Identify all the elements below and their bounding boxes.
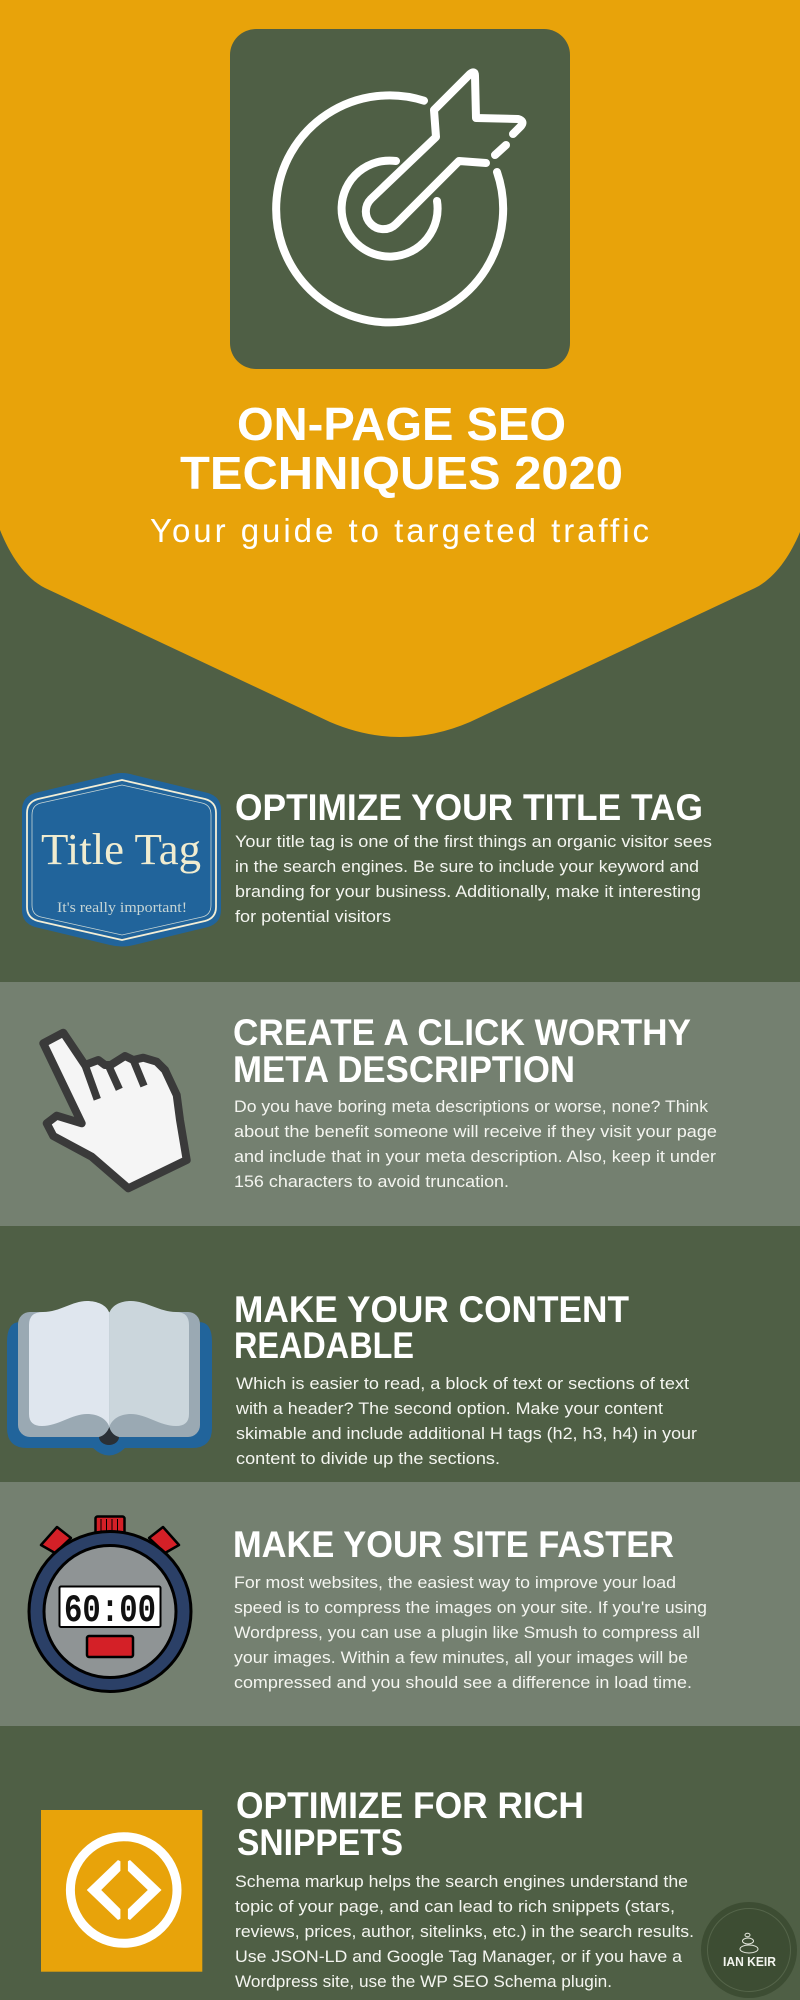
icon: pointing hand cursor (43, 1033, 187, 1188)
title (180, 398, 623, 499)
text block: title tag copy: Your title tag is one of the first things an organic visitor sees (235, 832, 712, 851)
text block: title tag copy (235, 832, 712, 926)
text block: rich snippets copy: Wordpress site, use the WP SEO Schema plugin. (235, 1972, 612, 1991)
icon: stopwatch: 60:00 (64, 1589, 156, 1633)
text block: rich snippets copy (235, 1872, 694, 1991)
heading: make your content readable (234, 1289, 629, 1366)
subtitle: Your guide to targeted traffic (150, 512, 649, 549)
icon: code brackets (41, 1810, 202, 1972)
text block: meta description copy: about the benefit someone will receive if they visit your page (234, 1122, 717, 1141)
heading: optimize for rich snippets: SNIPPETS (237, 1822, 403, 1863)
heading: make your content readable: READABLE (234, 1325, 414, 1366)
heading: make your content readable: MAKE YOUR CONTENT (234, 1289, 629, 1330)
panel: band site speed (0, 1482, 800, 1726)
text block: meta description copy: Do you have boring meta descriptions or worse, none? Think (234, 1097, 709, 1116)
text block: readable content copy: Which is easier to read, a block of text or sections of text (236, 1374, 689, 1393)
text block: meta description copy: 156 characters to avoid truncation. (234, 1172, 509, 1191)
text block: rich snippets copy: Use JSON-LD and Google Tag Manager, or if you have a (235, 1947, 683, 1966)
text block: site speed copy: your images. Within a few minutes, all your images will be (234, 1648, 688, 1667)
text block: readable content copy: with a header? The second option. Make your content (235, 1399, 663, 1418)
icon: Ian Keir logo badge (701, 1902, 797, 1998)
title: TECHNIQUES 2020 (180, 447, 623, 499)
panel: band meta description (0, 982, 800, 1226)
heading: optimize for rich snippets: OPTIMIZE FOR RICH (236, 1785, 584, 1826)
panel: readable content section (7, 1289, 697, 1468)
text block: readable content copy: skimable and include additional H tags (h2, h3, h4) in your (236, 1424, 697, 1443)
heading: optimize your title tag: OPTIMIZE YOUR TITLE TAG (235, 787, 703, 828)
icon: target with arrow (230, 29, 570, 369)
heading: create a click worthy meta description: CREATE A CLICK WORTHY (233, 1012, 691, 1053)
panel: meta description section (43, 1012, 717, 1191)
text block: site speed copy: Wordpress, you can use a plugin like Smush to compress all (234, 1623, 700, 1642)
panel: header banner (0, 0, 800, 737)
text block: rich snippets copy: Schema markup helps the search engines understand the (235, 1872, 688, 1891)
icon: Ian Keir logo badge: IAN KEIR (723, 1954, 777, 1969)
text block: title tag copy: in the search engines. Be sure to include your keyword and (235, 857, 699, 876)
icon: title tag badge: Title Tag (41, 825, 201, 874)
text block: rich snippets copy: reviews, prices, author, sitelinks, etc.) in the search results. (235, 1922, 694, 1941)
heading: create a click worthy meta description (233, 1012, 691, 1090)
text block: site speed copy: speed is to compress the images on your site. If you're using (234, 1598, 707, 1617)
text block: readable content copy: content to divide up the sections. (236, 1449, 500, 1468)
text block: readable content copy (235, 1374, 697, 1468)
icon: title tag badge: It's really important! (57, 900, 187, 916)
text block: title tag copy: for potential visitors (235, 907, 391, 926)
text block: site speed copy: For most websites, the easiest way to improve your load (234, 1573, 676, 1592)
text block: site speed copy: compressed and you should see a difference in load time. (234, 1673, 692, 1692)
icon: open book (7, 1301, 212, 1456)
title: ON-PAGE SEO (237, 398, 566, 450)
text block: rich snippets copy: topic of your page, and can lead to rich snippets (stars, (235, 1897, 675, 1916)
text block: title tag copy: branding for your business. Additionally, make it interesting (235, 882, 701, 901)
icon: stopwatch (29, 1516, 191, 1692)
panel: title tag section (22, 773, 712, 946)
panel: site speed section (29, 1516, 707, 1692)
text block: meta description copy: and include that in your meta description. Also, keep it under (234, 1147, 716, 1166)
text block: meta description copy (234, 1097, 717, 1191)
panel: rich snippets section (41, 1785, 694, 1991)
heading: make your site faster: MAKE YOUR SITE FASTER (233, 1524, 674, 1565)
icon: title tag badge (22, 773, 221, 946)
heading: optimize for rich snippets (236, 1785, 584, 1863)
heading: create a click worthy meta description: META DESCRIPTION (233, 1049, 575, 1090)
text block: site speed copy (234, 1573, 707, 1692)
